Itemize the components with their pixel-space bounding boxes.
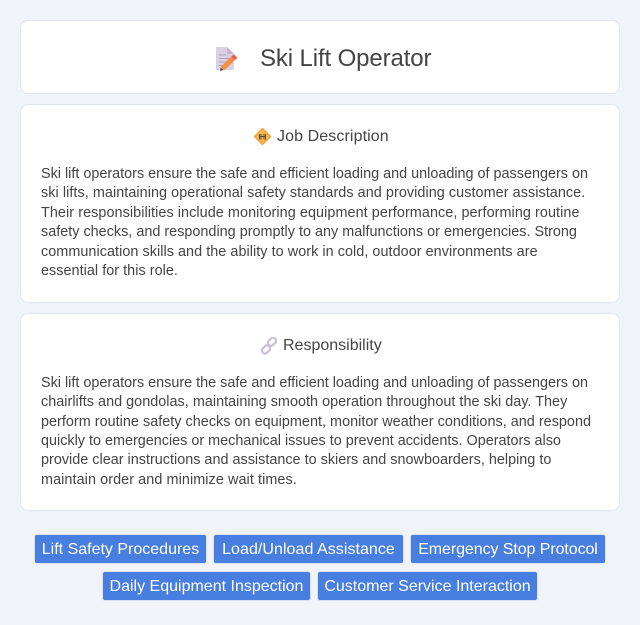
heading: responsibility: Responsibility [283, 337, 382, 354]
heading: job description: Job Description [277, 128, 389, 145]
text block: responsibility [41, 375, 591, 488]
text block: job description: essential for this role. [41, 263, 178, 279]
icon: road sign diamond [254, 128, 272, 146]
text block: responsibility: quickly to emergencies or mechanical issues to prevent accidents. Operators also [41, 433, 561, 449]
tag: load/unload assistance [213, 534, 404, 564]
text block: responsibility: maintain order and minimize wait times. [41, 472, 297, 488]
panel: responsibility [20, 313, 620, 511]
tag: emergency stop protocol [410, 534, 606, 564]
text block: responsibility: Ski lift operators ensure the safe and efficient loading and unloading of passengers on [41, 375, 588, 391]
text block: responsibility: perform routine safety checks on equipment, monitor weather conditions, and respond [41, 414, 591, 430]
text block: job description: Their responsibilities include monitoring equipment performance, performing routine [41, 205, 580, 221]
text block: job description: communication skills and the ability to work in cold, outdoor environments are [41, 244, 538, 260]
tag: customer service interaction [317, 571, 538, 601]
text block: responsibility: chairlifts and gondolas, maintaining smooth operation throughout the ski day. They [41, 394, 567, 410]
tag: daily equipment inspection: Daily Equipment Inspection [110, 578, 303, 595]
tag: lift safety procedures [34, 534, 207, 564]
text block: job description [41, 166, 588, 279]
title: Ski Lift Operator [260, 45, 431, 72]
text block: job description: ski lifts, maintaining operational safety standards and providing customer assistance. [41, 185, 585, 201]
tag: daily equipment inspection [102, 571, 311, 601]
icon: document with pencil [216, 47, 238, 71]
tag: emergency stop protocol: Emergency Stop Protocol [418, 541, 598, 558]
icon: chain link [260, 337, 278, 355]
text block: responsibility: provide clear instructions and assistance to skiers and snowboarders, helping to [41, 452, 551, 468]
tag: lift safety procedures: Lift Safety Procedures [42, 541, 199, 558]
tag: customer service interaction: Customer Service Interaction [324, 578, 531, 595]
text block: job description: safety checks, and responding promptly to any malfunctions or emergencies. Strong [41, 224, 577, 240]
panel: job description [20, 104, 620, 303]
panel: title card [20, 20, 620, 94]
text block: job description: Ski lift operators ensure the safe and efficient loading and unloading of passengers on [41, 166, 588, 182]
tag: load/unload assistance: Load/Unload Assistance [222, 541, 395, 558]
